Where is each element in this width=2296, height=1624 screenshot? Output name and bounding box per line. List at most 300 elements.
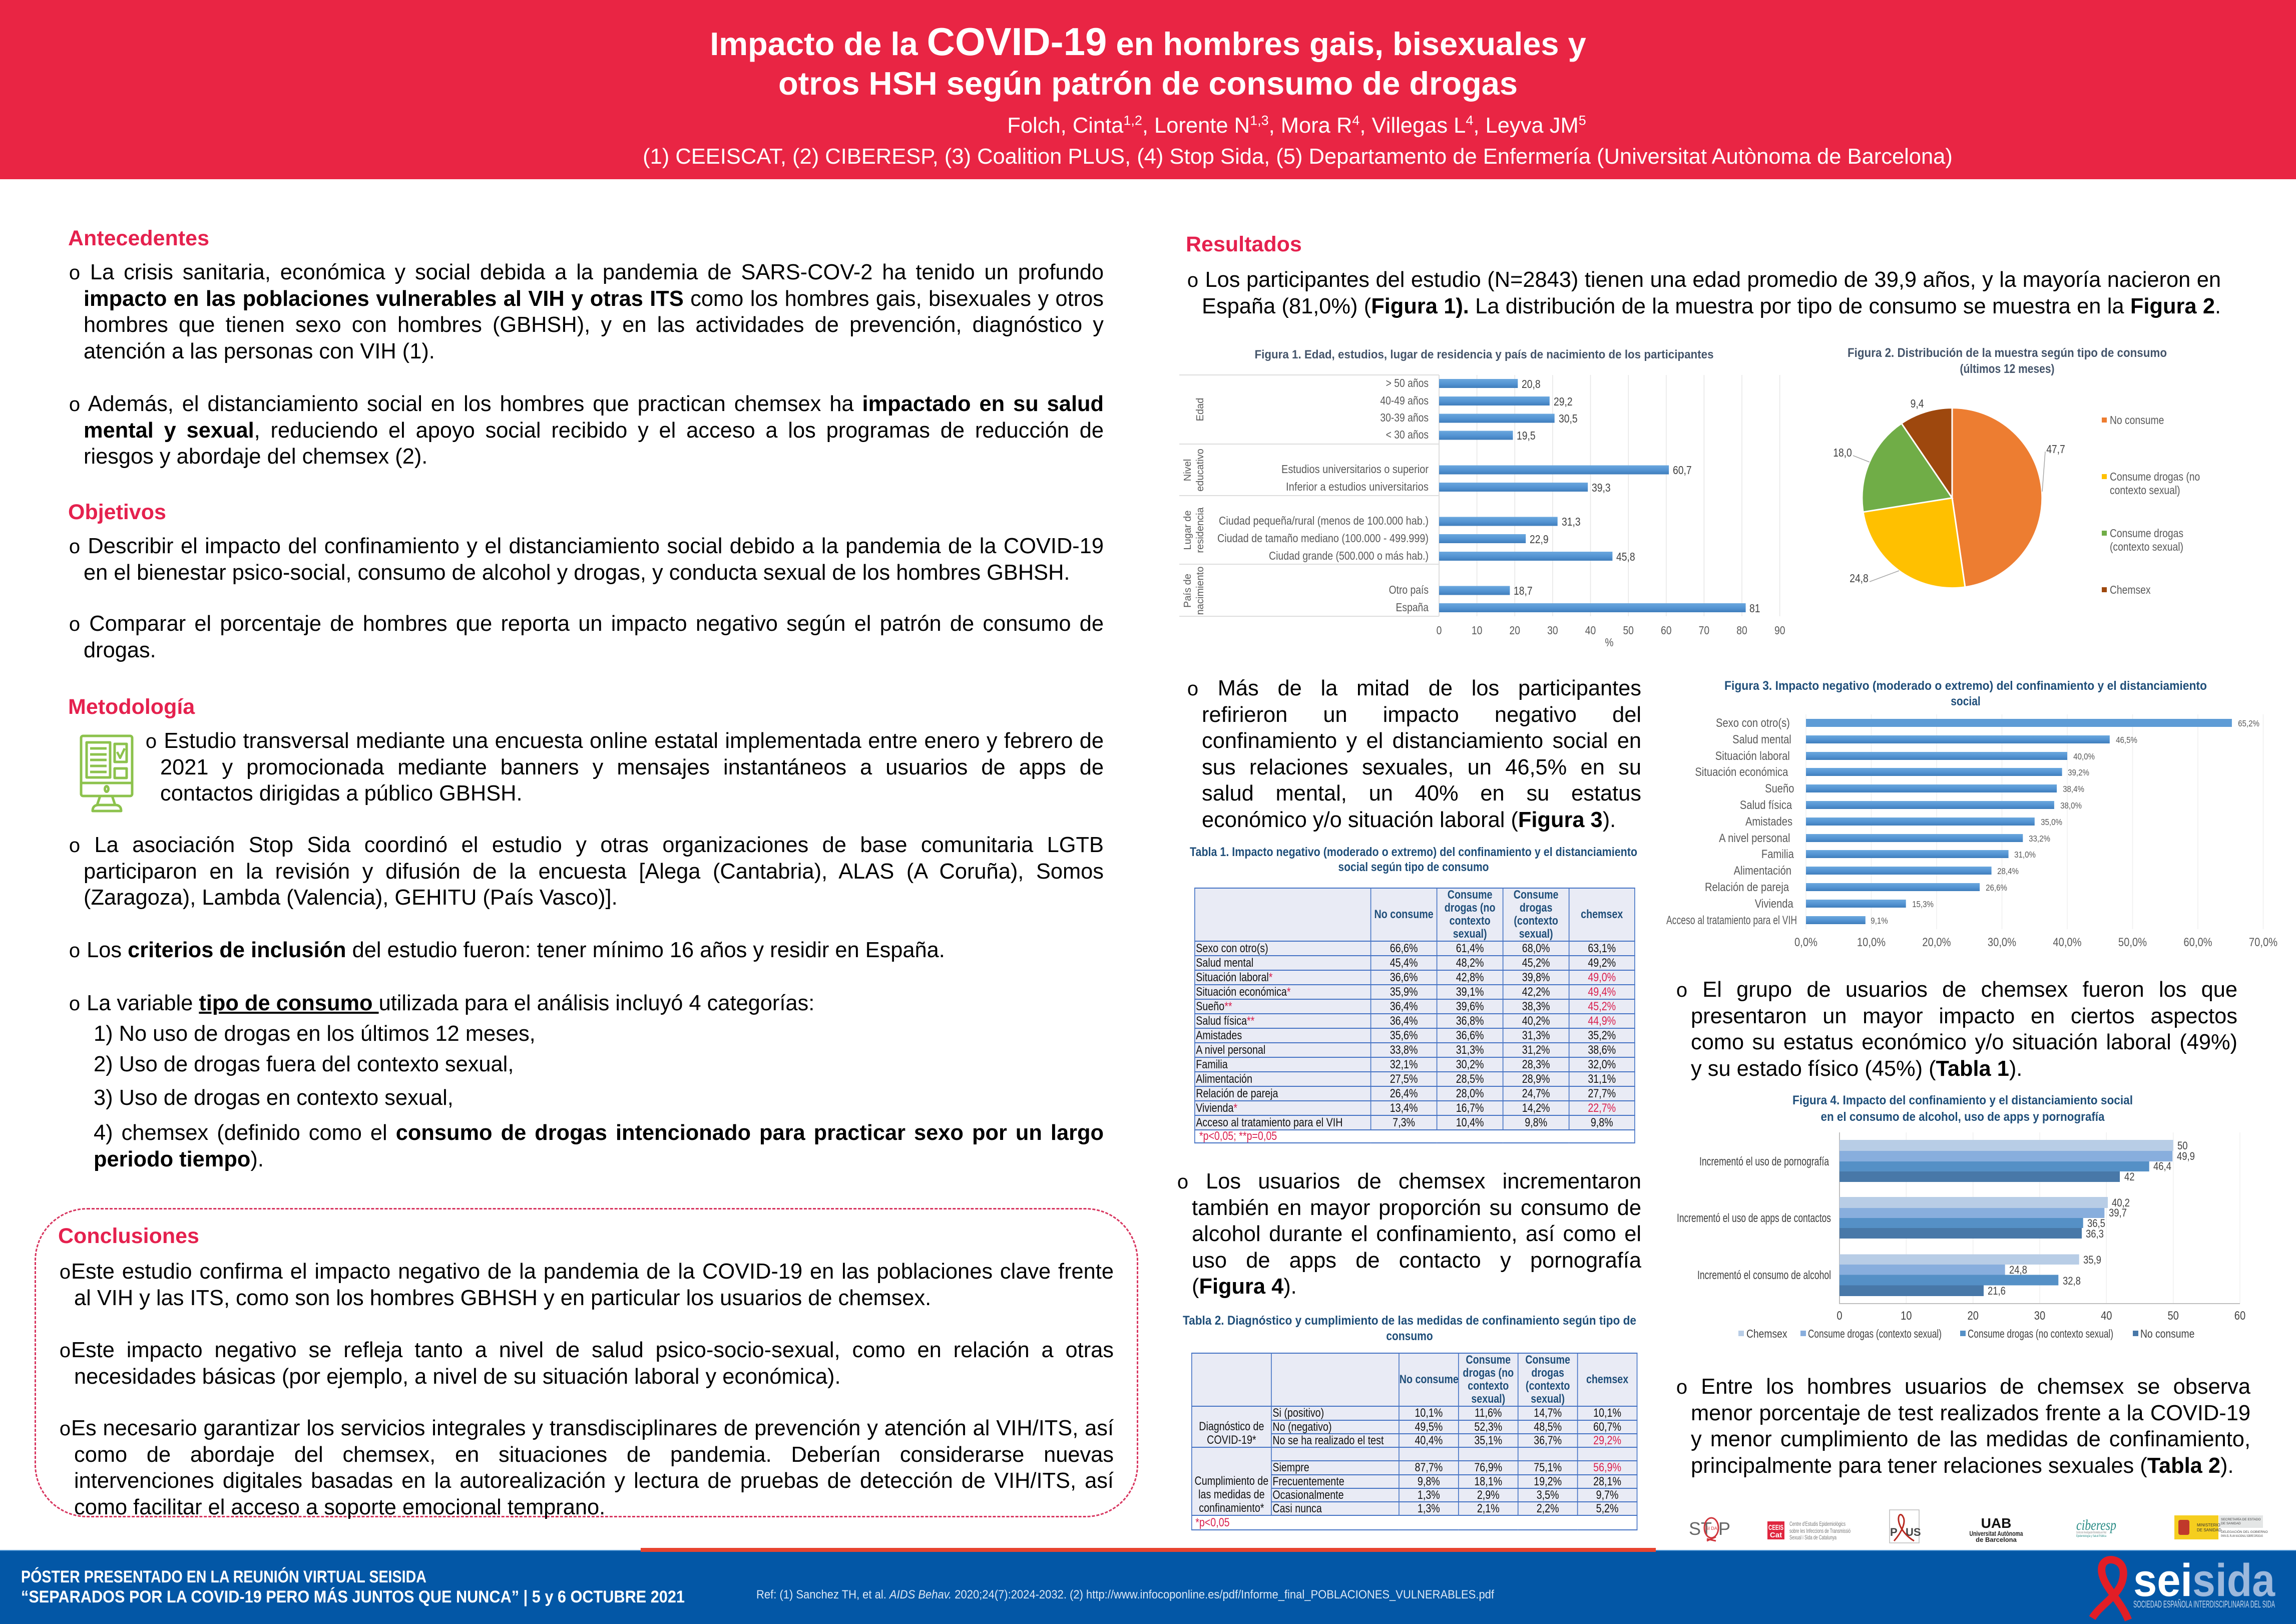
table 1: 45,2%: [1588, 999, 1616, 1013]
figura 4 values: 50: [2177, 1140, 2188, 1152]
text: más de la mitad: salud mental, un 40% en su estatus: [1202, 781, 1641, 805]
logo: Stop Sida: [1689, 1518, 1730, 1541]
table 1: Sueño**: [1196, 999, 1232, 1013]
table 1: contexto: [1450, 914, 1491, 928]
figura 3 category labels: Situación económica: [1695, 765, 1788, 778]
table 1: (contexto: [1514, 914, 1558, 928]
table 1: No consume: [1374, 908, 1434, 921]
text: objetivo 2: [69, 612, 1104, 662]
heading: Resultados: Resultados: [1186, 232, 1302, 256]
conclusión 3: como facilitar el acceso a soporte emocional temprano.: [74, 1495, 605, 1519]
table 1: Consume: [1514, 888, 1558, 902]
figura 3 category labels: [1666, 716, 1797, 927]
table 1: 36,4%: [1390, 999, 1418, 1013]
table 2: 14,7%: [1534, 1406, 1562, 1420]
logo: Ministerio de Sanidad: MINISTERIO: [2197, 1523, 2220, 1527]
table 1: 32,1%: [1390, 1057, 1418, 1071]
text: metodología 1: contactos dirigidas a público GBHSH.: [160, 781, 523, 805]
figura 1 x axis: 80: [1736, 625, 1747, 637]
text: grupo de usuarios de chemsex: y su estado físico (45%) (Tabla 1).: [1691, 1057, 2022, 1081]
pie slices: [1862, 408, 2042, 588]
text: objetivo 1: o Describir el impacto del confinamiento y el distanciamiento social debido a la pandemia de la COVID-19: [69, 534, 1104, 560]
authors: Folch, Cinta1,2, Lorente N1,3, Mora R4, Villegas L4, Leyva JM5: [1007, 113, 1586, 138]
figura 1 group labels: Lugar de: [1182, 511, 1193, 550]
logo: UAB: de Barcelona: [1976, 1536, 2017, 1543]
pie labels: 47,7: [2046, 444, 2065, 456]
table 1: 48,2%: [1456, 956, 1484, 969]
table 1: 49,4%: [1588, 985, 1616, 998]
figura 3 category labels: Sexo con otro(s): [1716, 716, 1790, 729]
text: grupo de usuarios de chemsex: o El grupo de usuarios de chemsex fueron los que: [1676, 978, 2237, 1003]
figura 2 title: Figura 2. Distribución de la muestra según tipo de consumo: [1848, 346, 2167, 360]
text: antecedentes 1: hombres que tienen sexo con hombres (GBHSH), y en las actividades de prevención, diagnóstico y: [84, 313, 1104, 337]
figura 3 category labels: Salud mental: [1732, 732, 1791, 746]
chart: figura 2 pie: [1827, 343, 2257, 603]
logo: CEEISCAT: Sexual i Sida de Catalunya: [1789, 1534, 1836, 1541]
table 1: 33,8%: [1390, 1043, 1418, 1056]
figura 1 x axis: 70: [1699, 625, 1709, 637]
table 1: 61,4%: [1456, 941, 1484, 955]
table 1: 36,6%: [1456, 1028, 1484, 1042]
table 2: 40,4%: [1415, 1434, 1443, 1447]
conclusión 3: [74, 1415, 1114, 1520]
table 1 title: [1186, 841, 1642, 876]
table 1: 35,6%: [1390, 1028, 1418, 1042]
figura 1 x axis: 0: [1437, 625, 1442, 637]
figura 3 values: 15,3%: [1912, 899, 1934, 909]
table 1: 66,6%: [1390, 941, 1418, 955]
table 2: Consume: [1466, 1353, 1511, 1367]
table 2: [1191, 1353, 1637, 1530]
figura 4 values: 36,5: [2087, 1218, 2105, 1230]
figura 3 category labels: Situación laboral: [1715, 749, 1790, 762]
text: test y cumplimiento: y menor cumplimiento de las medidas de confinamiento,: [1691, 1427, 2250, 1451]
text: antecedentes 2: o Además, el distanciamiento social en los hombres que practican chemsex ha impactado en su salud: [69, 392, 1104, 418]
figura 3 x axis: 50,0%: [2118, 935, 2147, 949]
table 2: 52,3%: [1474, 1420, 1502, 1434]
figura 3 category labels: Familia: [1761, 847, 1794, 861]
table 2: contexto: [1468, 1379, 1509, 1393]
affiliations: (1) CEEISCAT, (2) CIBERESP, (3) Coalition PLUS, (4) Stop Sida, (5) Departamento de Enfermería (Universitat Autònoma de Barcelona): [643, 145, 1953, 169]
heading: Objetivos: Objetivos: [68, 500, 166, 524]
figura 4 category labels: Incrementó el consumo de alcohol: [1697, 1269, 1831, 1282]
figura 1 values: 45,8: [1616, 551, 1635, 563]
logo: ciberesp: Centro de Investigación Biomédica en Red: [2076, 1531, 2106, 1534]
table 2: Ocasionalmente: [1272, 1488, 1344, 1502]
table 2: Siempre: [1272, 1461, 1309, 1474]
figura 4 values: 46,4: [2153, 1161, 2171, 1172]
text: usuarios de chemsex incrementaron: o Los usuarios de chemsex incrementaron: [1177, 1169, 1641, 1195]
text: más de la mitad: económico y/o situación laboral (Figura 3).: [1202, 808, 1616, 832]
figura 1 x axis: 40: [1585, 625, 1596, 637]
logo: Coalition PLUS: US: [1906, 1526, 1921, 1538]
figura 1 x axis: [1437, 625, 1785, 649]
logo: seisida: [2087, 1556, 2280, 1622]
table 1: Consume: [1448, 888, 1492, 902]
text: metodología 2: [69, 833, 1104, 910]
text: test y cumplimiento: principalmente para tener relaciones sexuales (Tabla 2).: [1691, 1454, 2234, 1478]
text: grupo de usuarios de chemsex: [1691, 977, 2237, 1082]
list: categorías de consumo: [94, 1022, 1104, 1171]
table 1: 26,4%: [1390, 1086, 1418, 1100]
figura 4 bars: [1840, 1140, 2173, 1265]
table 2: 10,1%: [1415, 1406, 1443, 1420]
figura 1 x axis: 30: [1547, 625, 1558, 637]
figura 1 category labels: 30-39 años: [1380, 412, 1429, 424]
figura 3 values: 31,0%: [2014, 850, 2036, 860]
figura 3 values: 46,5%: [2116, 735, 2137, 745]
figura 4 x axis: 0: [1836, 1309, 1843, 1322]
text: test y cumplimiento: [1691, 1374, 2250, 1479]
text: resultados intro: España (81,0%) (Figura 1). La distribución de la muestra por tipo de consumo se muestra en la Figura 2.: [1202, 294, 2221, 318]
table 1: chemsex: [1581, 908, 1623, 921]
logo: CEEISCAT: sobre les Infeccions de Transmissió: [1789, 1527, 1851, 1534]
heading: Metodología: Metodología: [68, 695, 195, 719]
table 1: 42,8%: [1456, 970, 1484, 984]
table 2: 87,7%: [1415, 1461, 1443, 1474]
table 2: 9,8%: [1418, 1475, 1440, 1488]
figura 1 title: Figura 1. Edad, estudios, lugar de residencia y país de nacimiento de los participantes: [1254, 348, 1714, 361]
figura 4 legend: No consume: [2140, 1328, 2194, 1340]
text: antecedentes 2: riesgos y abordaje del chemsex (2).: [84, 445, 427, 469]
pie legend: contexto sexual): [2110, 485, 2180, 497]
table 1: 28,3%: [1522, 1057, 1550, 1071]
pie legend: Chemsex: [2110, 584, 2151, 596]
figura 1 category labels: < 30 años: [1386, 429, 1429, 441]
table 1: 35,9%: [1390, 985, 1418, 998]
title line 2: otros HSH según patrón de consumo de drogas: [778, 65, 1518, 102]
table 1: Salud física**: [1196, 1014, 1254, 1027]
figura 1 category labels: [1217, 377, 1429, 614]
table 2: 28,1%: [1593, 1475, 1621, 1488]
figura 4 legend: Consume drogas (no contexto sexual): [1968, 1327, 2113, 1340]
figura 4 x axis: 20: [1967, 1309, 1979, 1322]
figura 1 values: 22,9: [1530, 534, 1549, 546]
conclusión 1: oEste estudio confirma el impacto negativo de la pandemia de la COVID-19 en las poblaciones clave frente: [59, 1260, 1114, 1285]
table 2: 35,1%: [1474, 1434, 1502, 1447]
figura 3 category labels: Sueño: [1765, 781, 1794, 795]
table 1: 38,6%: [1588, 1043, 1616, 1056]
table 2: chemsex: [1586, 1373, 1628, 1386]
figura 1 category labels: Ciudad grande (500.000 o más hab.): [1269, 549, 1429, 562]
pie legend: No consume: [2110, 415, 2164, 427]
text: criterios de inclusión: o Los criterios de inclusión del estudio fueron: tener mínimo 16 años y residir en España.: [69, 938, 945, 964]
logo: Ministerio de Sanidad: PARA EL PLAN NACIONAL SOBRE DROGAS: [2221, 1534, 2263, 1538]
table 1: 28,0%: [1456, 1086, 1484, 1100]
logo: Coalition PLUS: P: [1890, 1526, 1898, 1538]
figura 1 category labels: > 50 años: [1386, 377, 1429, 389]
figura 2 title: (últimos 12 meses): [1960, 361, 2055, 375]
figura 3 values: 9,1%: [1871, 916, 1888, 926]
figura 1 category labels: Estudios universitarios o superior: [1281, 463, 1429, 476]
figura 4 x axis: 40: [2101, 1309, 2112, 1322]
table 1: 31,1%: [1588, 1072, 1616, 1085]
conclusión 3: como de abordaje del chemsex, en situaciones de pandemia. Deberían considerarse nuevas: [74, 1443, 1114, 1467]
table 2: drogas: [1531, 1366, 1564, 1380]
table 2: 2,1%: [1477, 1502, 1500, 1515]
figura 1 group labels: residencia: [1195, 507, 1206, 553]
footer text: reunión: “SEPARADOS POR LA COVID-19 PERO MÁS JUNTOS QUE NUNCA” | 5 y 6 OCTUBRE 2021: [21, 1587, 685, 1606]
text: grupo de usuarios de chemsex: presentaron un mayor impacto en ciertos aspectos: [1691, 1004, 2237, 1028]
text: objetivo 2: o Comparar el porcentaje de hombres que reporta un impacto negativo según el patrón de consumo de: [69, 612, 1104, 637]
figura 3 category labels: A nivel personal: [1719, 831, 1790, 845]
pie legend: (contexto sexual): [2110, 541, 2183, 553]
figura 1 x axis: 90: [1774, 625, 1785, 637]
figura 3 values: 28,4%: [1997, 866, 2019, 876]
figura 4 category labels: Incrementó el uso de pornografía: [1699, 1155, 1829, 1168]
table 1: Alimentación: [1196, 1072, 1252, 1085]
text: test y cumplimiento: menor porcentaje de test realizados frente a la COVID-19: [1691, 1401, 2250, 1425]
text: usuarios de chemsex incrementaron: [1192, 1168, 1641, 1300]
figura 3 category labels: Vivienda: [1755, 897, 1793, 910]
figura 1 x axis: 20: [1510, 625, 1520, 637]
logo: Ministerio de Sanidad: DE SANIDAD: [2221, 1522, 2241, 1525]
figura 1 bars: [1439, 379, 1746, 612]
text: resultados intro: o Los participantes del estudio (N=2843) tienen una edad promedio de 39,9 años, y la mayoría nacieron en: [1187, 268, 2221, 293]
table 1: sexual): [1453, 927, 1487, 941]
figura 4 values: 35,9: [2083, 1255, 2101, 1266]
table 2: 18,1%: [1474, 1475, 1502, 1488]
figura 3 values: 38,0%: [2060, 800, 2082, 810]
table 2: las medidas de: [1198, 1488, 1265, 1501]
footer text: reunión: [15, 1564, 691, 1607]
figura 3 category labels: Acceso al tratamiento para el VIH: [1666, 914, 1797, 927]
pie labels: 18,0: [1833, 447, 1852, 459]
figura 1 values: [1514, 378, 1760, 615]
table 2: 36,7%: [1534, 1434, 1562, 1447]
logo: Stop Sida: SI DA: [1705, 1526, 1717, 1531]
text: antecedentes 1: atención a las personas con VIH (1).: [84, 339, 435, 363]
table 2: 48,5%: [1534, 1420, 1562, 1434]
figura 4 legend: Consume drogas (contexto sexual): [1808, 1327, 1942, 1340]
text: variable tipo de consumo: o La variable tipo de consumo utilizada para el análisis incluyó 4 categorías:: [69, 991, 814, 1017]
figura 1 category labels: España: [1396, 602, 1429, 614]
figura 3 category labels: Alimentación: [1734, 864, 1791, 877]
pie labels: 9,4: [1911, 398, 1924, 410]
figura 1 group labels: educativo: [1195, 449, 1206, 492]
text: más de la mitad: sus relaciones sexuales, un 46,5% en su: [1202, 755, 1641, 779]
table 2: 2,2%: [1537, 1502, 1559, 1515]
table 2: 1,3%: [1418, 1488, 1440, 1502]
table 2: 56,9%: [1593, 1461, 1621, 1474]
figura 3 x axis: [1794, 935, 2277, 949]
table 2: Si (positivo): [1272, 1406, 1324, 1420]
table 1: Situación económica*: [1196, 985, 1291, 998]
table 1: 27,7%: [1588, 1086, 1616, 1100]
table 2: 5,2%: [1596, 1502, 1618, 1515]
figura 3 x axis: 30,0%: [1988, 935, 2016, 949]
table 1: Sexo con otro(s): [1196, 941, 1268, 955]
figura 4 values: 24,8: [2009, 1265, 2027, 1276]
table 1: 28,5%: [1456, 1072, 1484, 1085]
text: antecedentes 1: impacto en las poblaciones vulnerables al VIH y otras ITS como los hombres gais, bisexuales y otros: [84, 287, 1104, 311]
chart: figura 4: en el consumo de alcohol, uso de apps y pornografía: [1821, 1110, 2105, 1124]
figura 3 values: 38,4%: [2063, 784, 2084, 794]
table 1: 40,2%: [1522, 1014, 1550, 1027]
table 2: Diagnóstico de: [1199, 1420, 1264, 1433]
table 2: Consume: [1525, 1353, 1570, 1367]
text: usuarios de chemsex incrementaron: alcohol durante el confinamiento, así como el: [1192, 1222, 1641, 1246]
table 1: 7,3%: [1393, 1115, 1415, 1129]
figura 1 values: 30,5: [1559, 413, 1578, 425]
logo: Stop Sida: P: [1718, 1518, 1730, 1539]
text: antecedentes 1: [69, 260, 1104, 363]
logo: CEEISCAT: Cat: [1770, 1531, 1782, 1539]
table 1: 45,2%: [1522, 956, 1550, 969]
table 1: 13,4%: [1390, 1101, 1418, 1114]
table 1: 45,4%: [1390, 956, 1418, 969]
figura 4 title: Figura 4. Impacto del confinamiento y el distanciamiento social: [1792, 1093, 2133, 1107]
figura 3 x axis: 70,0%: [2249, 935, 2277, 949]
figura 1 values: 20,8: [1522, 378, 1541, 390]
table 2: 76,9%: [1474, 1461, 1502, 1474]
table 1: 27,5%: [1390, 1072, 1418, 1085]
figura 3 values: [1871, 718, 2259, 926]
table 1: 24,7%: [1522, 1086, 1550, 1100]
table 1: 36,6%: [1390, 970, 1418, 984]
logo: seisida: sida: [2192, 1555, 2275, 1606]
logo: CEEISCAT: CEEIS: [1768, 1523, 1783, 1532]
figura 3 values: 39,2%: [2068, 767, 2089, 777]
figura 4 values: 21,6: [1988, 1286, 2006, 1297]
figura 4 legend: Chemsex: [1746, 1328, 1787, 1340]
figura 1 values: 31,3: [1562, 516, 1581, 528]
footer text: reunión: PÓSTER PRESENTADO EN LA REUNIÓN VIRTUAL SEISIDA: [21, 1567, 426, 1586]
categoría 1: 1) No uso de drogas en los últimos 12 meses,: [94, 1022, 536, 1046]
figura 1 category labels: Otro país: [1389, 584, 1429, 596]
table 2 title: consumo: [1386, 1329, 1433, 1343]
figura 1 group labels: Nivel: [1182, 459, 1193, 481]
text: grupo de usuarios de chemsex: como su estatus económico y/o situación laboral (49%): [1691, 1030, 2237, 1054]
figura 4 category labels: [1677, 1155, 1831, 1282]
text: usuarios de chemsex incrementaron: (Figura 4).: [1192, 1275, 1297, 1299]
figura 1 category labels: Ciudad de tamaño mediano (100.000 - 499.999): [1217, 532, 1429, 545]
text: objetivo 1: en el bienestar psico-social, consumo de alcohol y drogas, y conducta sexual de los hombres GBHSH.: [84, 561, 1070, 585]
text: metodología 2: participaron en la revisión y difusión de la encuesta [Alega (Cantabria), ALAS (A Coruña), Somos: [84, 860, 1104, 884]
figura 1 values: 39,3: [1592, 482, 1611, 494]
table 1: 39,8%: [1522, 970, 1550, 984]
figura 1 group labels: Edad: [1195, 398, 1206, 421]
table 1: 39,6%: [1456, 999, 1484, 1013]
table 2: 10,1%: [1593, 1406, 1621, 1420]
table 1 title: Tabla 1. Impacto negativo (moderado o extremo) del confinamiento y el distanciamiento: [1190, 845, 1637, 859]
chart: figura 3: [1662, 673, 2292, 954]
text: más de la mitad: confinamiento y el distanciamiento social en: [1202, 729, 1641, 753]
figura 4 values: 42: [2124, 1171, 2135, 1183]
table 2: 11,6%: [1475, 1406, 1502, 1420]
figura 4 x axis: 30: [2034, 1309, 2045, 1322]
categoría 4: [94, 1121, 1104, 1171]
table 2: Cumplimiento de: [1195, 1474, 1268, 1488]
pie labels: [1833, 398, 2065, 585]
figura 4 values: 40,2: [2112, 1197, 2130, 1209]
table 1: 30,2%: [1456, 1057, 1484, 1071]
conclusión 2: oEste impacto negativo se refleja tanto a nivel de salud psico-socio-sexual, como en relación a otras: [59, 1338, 1114, 1364]
heading: Conclusiones: Conclusiones: [58, 1224, 199, 1248]
footer text: referencias: Ref: (1) Sanchez TH, et al. AIDS Behav. 2020;24(7):2024-2032. (2) http://www.infocoponline.es/pdf/Informe_final_POBLACIONES_VULNERABLES.pdf: [756, 1588, 1494, 1601]
figura 4 values: 36,3: [2086, 1229, 2104, 1240]
logo: Coalition PLUS: [1890, 1510, 1921, 1543]
figura 2 title: [1848, 346, 2167, 375]
categoría 2: 2) Uso de drogas fuera del contexto sexual,: [94, 1052, 514, 1076]
figura 4 x axis: [1836, 1309, 2245, 1322]
table 1: 35,2%: [1588, 1028, 1616, 1042]
table 2: (contexto: [1526, 1379, 1570, 1393]
pie labels: 24,8: [1850, 573, 1869, 585]
figura 1 values: 81: [1749, 603, 1760, 615]
categoría 3: 3) Uso de drogas en contexto sexual,: [94, 1086, 453, 1110]
chart: figura 4: [1672, 1089, 2292, 1344]
logo: Stop Sida: ST: [1689, 1518, 1712, 1539]
figura 4 category labels: Incrementó el uso de apps de contactos: [1677, 1211, 1831, 1225]
figura 1 category labels: Ciudad pequeña/rural (menos de 100.000 hab.): [1219, 514, 1429, 527]
table 1: 49,2%: [1588, 956, 1616, 969]
logo: Ministerio de Sanidad: SECRETARÍA DE ESTADO: [2221, 1517, 2261, 1521]
table 1: 31,3%: [1522, 1028, 1550, 1042]
table 1: 28,9%: [1522, 1072, 1550, 1085]
table 1 title: social según tipo de consumo: [1338, 860, 1489, 874]
text: test y cumplimiento: o Entre los hombres usuarios de chemsex se observa: [1676, 1375, 2250, 1400]
conclusión 2: [74, 1337, 1114, 1390]
logo: ciberesp: ciberesp: [2076, 1517, 2116, 1533]
conclusión 1: [74, 1259, 1114, 1311]
figura 3 x axis: 60,0%: [2183, 935, 2212, 949]
table 2: confinamiento*: [1199, 1501, 1264, 1515]
table 1: drogas: [1520, 901, 1552, 915]
logos row: [1682, 1507, 2267, 1546]
figura 1 category labels: 40-49 años: [1380, 395, 1429, 407]
figura 1 x axis: 10: [1472, 625, 1482, 637]
pie legend: Consume drogas: [2110, 528, 2183, 540]
table 2: Casi nunca: [1272, 1502, 1322, 1515]
table 2: drogas (no: [1463, 1366, 1514, 1380]
table 1: 68,0%: [1522, 941, 1550, 955]
text: objetivo 2: drogas.: [84, 638, 156, 662]
table 2: *p<0,05: [1195, 1516, 1230, 1529]
figura 3 values: 33,2%: [2029, 834, 2050, 844]
table 2: 29,2%: [1593, 1434, 1621, 1447]
figura 1 group labels: [1182, 398, 1206, 615]
header banner: [0, 0, 2296, 179]
figura 1 group labels: País de: [1182, 574, 1193, 608]
figura 1 x axis: 60: [1661, 625, 1672, 637]
table 1: 32,0%: [1588, 1057, 1616, 1071]
table 2: 9,7%: [1596, 1488, 1618, 1502]
figura 4 x axis: 50: [2167, 1309, 2179, 1322]
conclusión 1: al VIH y las ITS, como son los hombres GBHSH y en particular los usuarios de chemsex.: [74, 1286, 931, 1310]
figura 4 values: 39,7: [2109, 1207, 2127, 1219]
table 2: 1,3%: [1418, 1502, 1440, 1515]
figura 4 x axis: 60: [2234, 1309, 2245, 1322]
table 1: 39,1%: [1456, 985, 1484, 998]
table 1: Relación de pareja: [1196, 1086, 1278, 1100]
icon: computer with survey form: [80, 735, 133, 812]
figura 3 x axis: 20,0%: [1922, 935, 1951, 949]
figura 1 values: 60,7: [1673, 465, 1692, 477]
table 2: 2,9%: [1477, 1488, 1500, 1502]
table 2: 75,1%: [1534, 1461, 1562, 1474]
heading: Antecedentes: Antecedentes: [68, 226, 209, 250]
figura 3 x axis: 40,0%: [2053, 935, 2082, 949]
figura 4 values: 32,8: [2063, 1276, 2081, 1287]
text: más de la mitad: [1202, 675, 1641, 834]
table 1: Salud mental: [1196, 956, 1253, 969]
table 2: Frecuentemente: [1272, 1475, 1344, 1488]
logo: Ministerio de Sanidad: DE SANIDAD: [2197, 1528, 2221, 1532]
table 1: 36,4%: [1390, 1014, 1418, 1027]
figura 1 values: 19,5: [1517, 430, 1536, 442]
logo: CEEISCAT: Centre d'Estudis Epidemiològics: [1789, 1520, 1846, 1527]
